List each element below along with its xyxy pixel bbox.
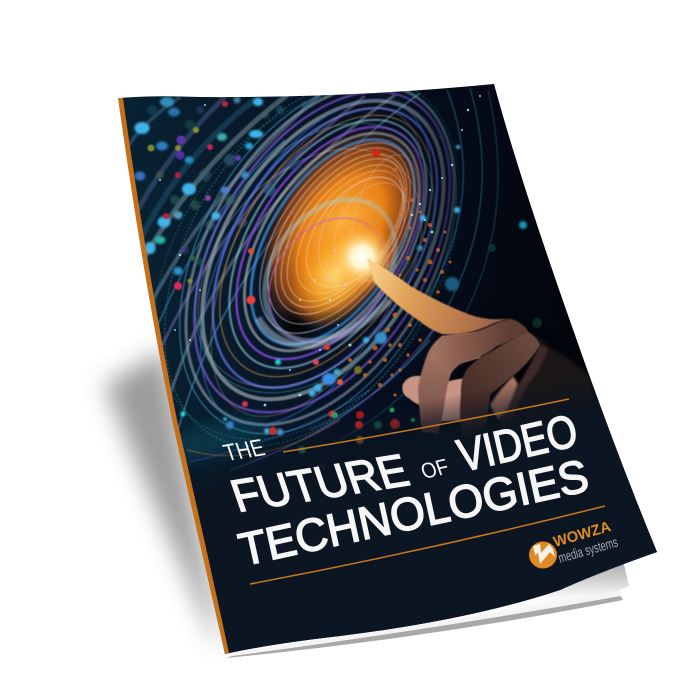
logo mark <box>529 542 557 568</box>
title word: TECHNOLOGIES: TECHNOLOGIES <box>234 449 593 576</box>
darkness around hand <box>454 320 540 398</box>
middle finger upper <box>430 319 528 372</box>
booklet illustration <box>94 84 657 658</box>
cover background <box>121 84 657 654</box>
central flash <box>333 224 396 291</box>
little finger sliver <box>490 376 518 420</box>
title word: FUTURE: FUTURE <box>224 444 415 522</box>
cover <box>121 84 657 654</box>
middle finger tip section <box>418 330 482 434</box>
ring finger <box>460 331 540 442</box>
cyan specks <box>159 95 481 406</box>
bokeh dots: magenta, red and violet <box>148 101 542 444</box>
bokeh dots: blue field <box>134 96 527 472</box>
dark swirl core <box>278 306 314 339</box>
title word: VIDEO: VIDEO <box>453 404 582 482</box>
light band under swirl <box>258 300 390 345</box>
bokeh dots: muted <box>147 101 309 266</box>
logo <box>529 518 619 568</box>
knuckle ridge <box>500 345 548 425</box>
logo wordmark: WOWZA <box>551 518 613 551</box>
diagonal light streaks <box>125 88 498 470</box>
drop shadow <box>105 350 222 650</box>
lower rule <box>250 506 605 584</box>
upper rule <box>283 399 569 452</box>
inner pages <box>226 556 629 658</box>
title word: THE: THE <box>220 435 268 467</box>
yellow inner glow <box>291 223 377 327</box>
teal haze low left <box>180 414 268 464</box>
logo tagline: media systems <box>556 534 619 566</box>
back of hand <box>516 333 594 414</box>
title word: OF: OF <box>417 454 452 484</box>
hand <box>367 258 600 445</box>
spine <box>118 98 229 654</box>
central orange glow <box>260 129 422 326</box>
orange sparkle cloud <box>348 168 452 397</box>
index finger <box>367 258 511 334</box>
swirl rings <box>155 90 460 447</box>
dark lower cover <box>190 374 657 654</box>
title <box>220 404 593 576</box>
thumb <box>402 376 466 422</box>
